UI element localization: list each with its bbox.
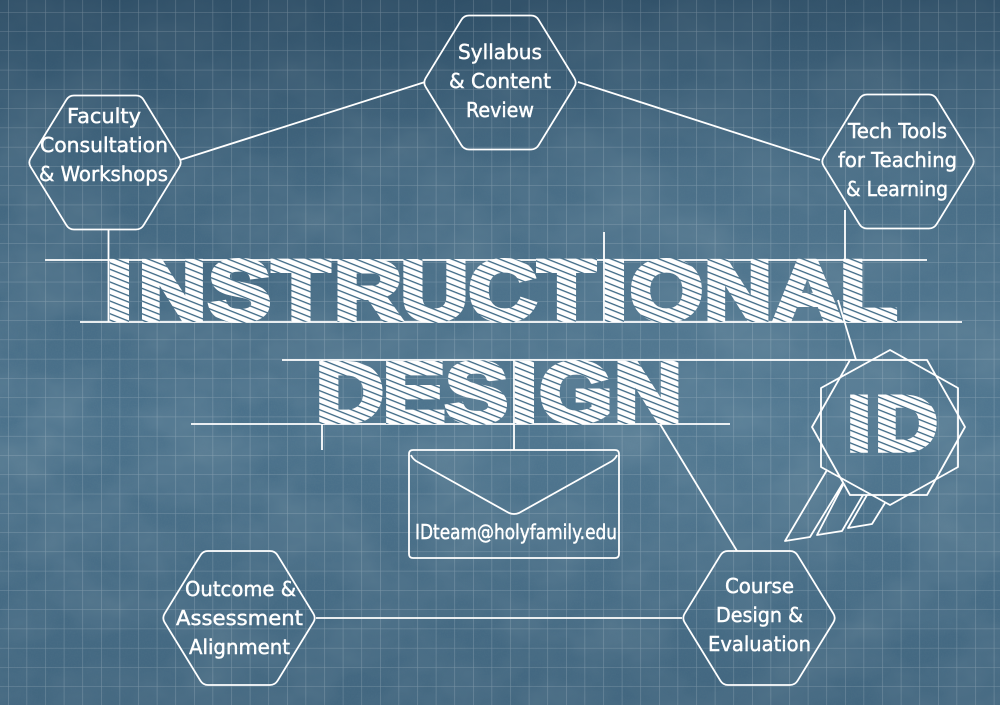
hexagon: Faculty Consultation & Workshops: Faculty (67, 104, 141, 128)
hexagon: Syllabus & Content Review: Review (466, 98, 534, 122)
hexagon: Syllabus & Content Review: Syllabus (458, 40, 542, 64)
title: DESIGN: DESIGN (316, 345, 682, 439)
hexagon: Outcome & Assessment Alignment (163, 551, 315, 685)
hexagon: Tech Tools for Teaching & Learning (822, 94, 974, 228)
hexagon: Tech Tools for Teaching & Learning: & Learning (846, 177, 948, 201)
connector lines (45, 82, 962, 618)
envelope with email address (409, 450, 619, 558)
hexagon: Faculty Consultation & Workshops (29, 96, 181, 230)
badge: ID rosette with ribbons (785, 350, 965, 541)
badge: ID rosette with ribbons: ID (847, 380, 938, 468)
title: INSTRUCTIONAL: INSTRUCTIONAL (106, 243, 897, 337)
hexagon: Syllabus & Content Review: & Content (449, 69, 551, 93)
hexagon: Course Design & Evaluation: Evaluation (708, 632, 811, 656)
hexagon: Faculty Consultation & Workshops: & Workshops (39, 162, 168, 186)
hexagon: Course Design & Evaluation: Design & (716, 603, 803, 627)
envelope with email address: IDteam@holyfamily.edu (415, 520, 617, 544)
hexagon: Faculty Consultation & Workshops: Consultation (40, 133, 168, 157)
hexagon: Syllabus & Content Review (424, 16, 576, 150)
hexagon: Course Design & Evaluation: Course (725, 574, 794, 598)
hexagon: Outcome & Assessment Alignment: Assessment (176, 606, 303, 630)
hexagon: Outcome & Assessment Alignment: Outcome & (185, 577, 296, 601)
connector: diagonal to badge (838, 300, 856, 360)
hexagon: Tech Tools for Teaching & Learning: Tech Tools (847, 119, 947, 143)
hexagon: Tech Tools for Teaching & Learning: for Teaching (838, 148, 957, 172)
hexagon: Course Design & Evaluation (683, 551, 835, 685)
hexagon: Outcome & Assessment Alignment: Alignment (189, 635, 290, 659)
